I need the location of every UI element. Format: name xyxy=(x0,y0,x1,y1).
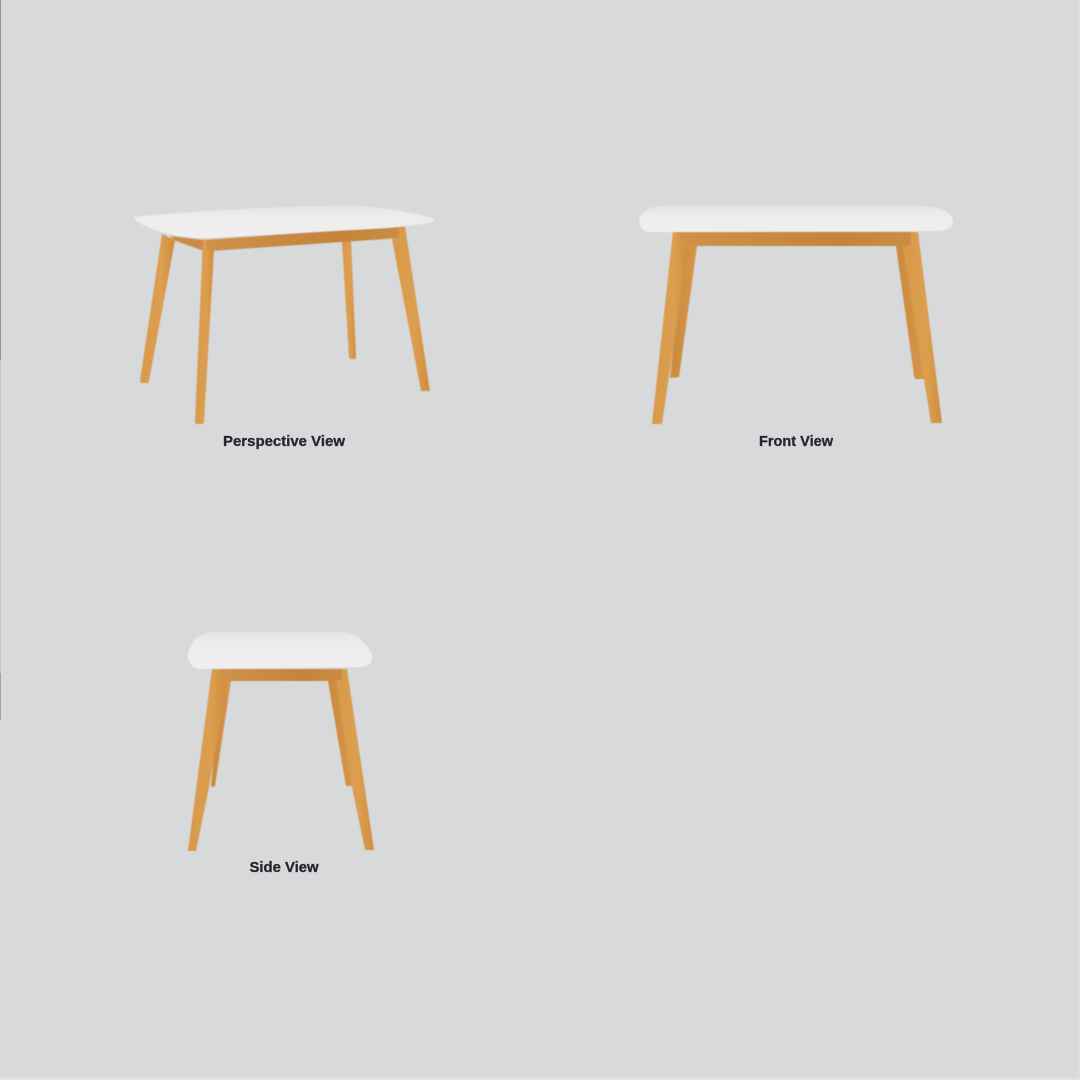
panel: side view xyxy=(188,632,374,876)
rear left leg xyxy=(670,246,697,378)
rear left leg xyxy=(211,681,231,787)
tabletop xyxy=(188,632,372,669)
label: front view: Front View xyxy=(759,434,834,450)
panel: perspective view xyxy=(134,206,435,450)
back leg xyxy=(342,241,356,359)
tabletop xyxy=(134,206,435,238)
illustration: table from side xyxy=(188,632,374,851)
right leg xyxy=(392,226,430,391)
rear right leg xyxy=(328,681,352,786)
illustration: table in perspective xyxy=(134,206,435,424)
front leg xyxy=(195,240,214,424)
apron xyxy=(680,232,912,246)
side apron xyxy=(170,236,204,251)
illustration: table from front xyxy=(639,206,953,424)
rear right leg xyxy=(896,246,924,379)
label: perspective view: Perspective View xyxy=(223,434,346,450)
front left leg xyxy=(652,232,688,424)
front right leg xyxy=(336,669,374,850)
panel: front view xyxy=(639,206,953,450)
front left leg xyxy=(188,669,227,851)
apron xyxy=(219,669,343,681)
front right leg xyxy=(903,232,942,423)
left leg xyxy=(140,234,175,383)
front apron xyxy=(203,226,400,251)
tabletop xyxy=(639,206,953,232)
label: side view: Side View xyxy=(250,860,319,876)
